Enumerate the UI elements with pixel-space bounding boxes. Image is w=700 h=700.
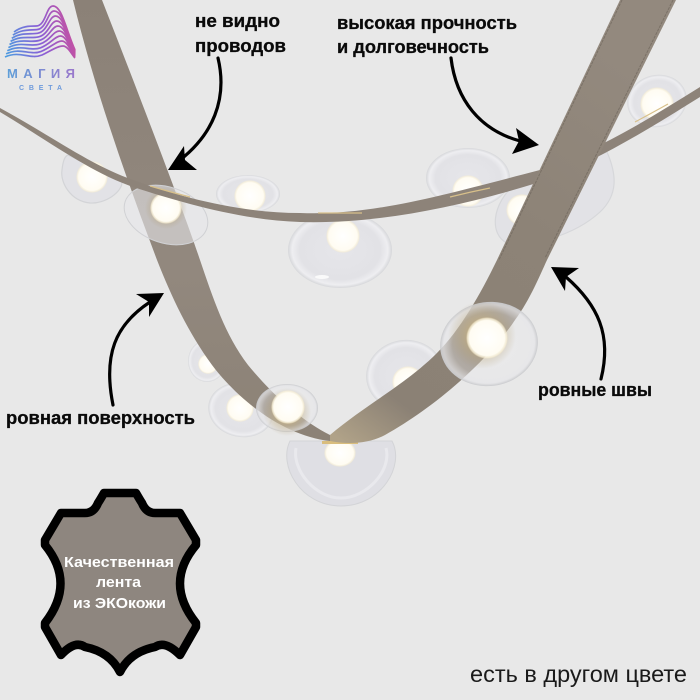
- arrow to strip: smooth surface: [110, 293, 164, 405]
- label: wires hidden: [195, 11, 286, 56]
- lamp bulb behind right strip, lower: [361, 334, 449, 416]
- lamp bulb in front of right strip: [435, 296, 543, 392]
- thin band of the garland: [0, 87, 700, 222]
- badge text: [64, 554, 174, 612]
- logo: Магия Света: [5, 6, 75, 92]
- logo wave mark: [5, 6, 75, 58]
- lamp bulb behind right strip: [495, 152, 614, 244]
- lamp bulb behind band, upper middle: [216, 175, 280, 213]
- label: strength and durability: [337, 13, 517, 57]
- badge text: Качественная: [64, 554, 174, 571]
- lamp bulb behind band, far left: [62, 155, 122, 203]
- warm light on band: [150, 104, 668, 213]
- lamp bulb, far right: [621, 68, 693, 134]
- lamp bulb behind band, upper right of centre: [426, 148, 510, 208]
- stitching, right strip left edge: [499, 0, 622, 260]
- lamp bulb behind left strip, lower: [188, 340, 226, 382]
- label: wires hidden: проводов: [195, 36, 286, 56]
- arrow to strip: even seams: [551, 267, 605, 379]
- arrow to strip: strength: [451, 58, 539, 154]
- label: wires hidden: не видно: [195, 11, 280, 31]
- leather hide shape: [45, 493, 196, 672]
- badge text: лента: [96, 574, 142, 591]
- badge text: из ЭКОкожи: [73, 595, 166, 612]
- leather strip, right side: [330, 0, 676, 443]
- lamp bulb in front of left strip: [116, 175, 216, 255]
- label: even seams: ровные швы: [538, 380, 652, 400]
- note: available in other colour: есть в другом цвете: [470, 661, 687, 687]
- label: strength and durability: высокая прочность: [337, 13, 517, 33]
- logo word СВЕТА: СВЕТА: [19, 85, 62, 92]
- stitching, right strip right edge: [545, 0, 673, 258]
- lamp bulb under fold: [287, 439, 396, 506]
- lamp bulb in front of left strip, lower: [256, 384, 318, 436]
- arrow to band: wires hidden: [168, 58, 221, 170]
- leather badge: [45, 493, 196, 672]
- leather strip, left side: [73, 0, 345, 441]
- label: smooth surface: ровная поверхность: [6, 408, 195, 428]
- logo word МАГИЯ: МАГИЯ: [7, 66, 75, 81]
- lamp bulb behind left strip, lowest: [203, 377, 279, 443]
- label: strength and durability: и долговечность: [337, 37, 489, 57]
- lamp bulb centre, large: [288, 212, 392, 288]
